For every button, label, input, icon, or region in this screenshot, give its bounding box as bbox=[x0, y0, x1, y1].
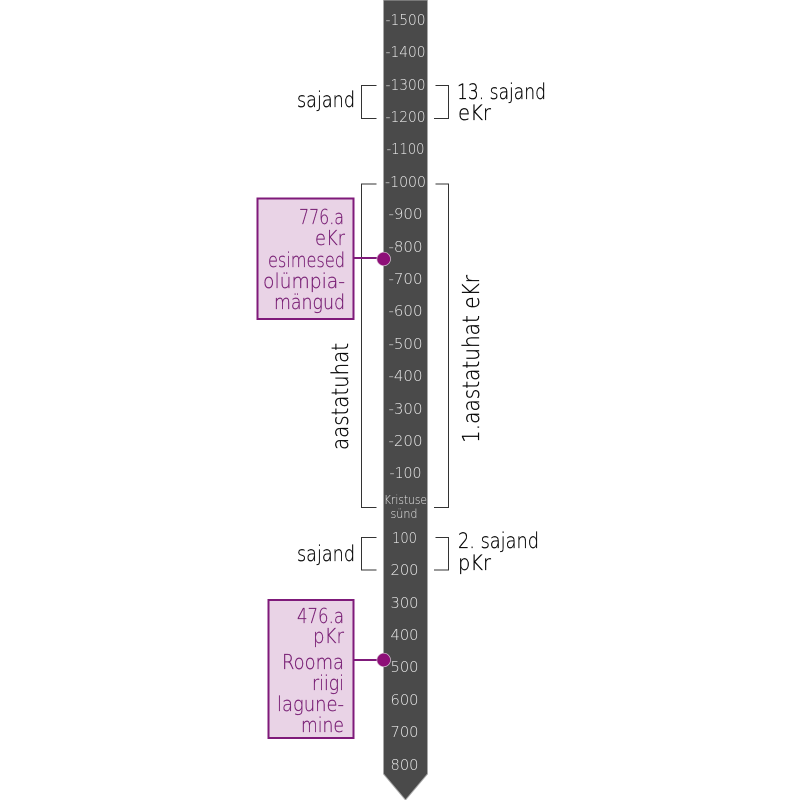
bracket: century right, bottom bbox=[434, 538, 448, 570]
label: birth of Christ: Kristuse bbox=[384, 493, 427, 507]
text: millennium, vertical: aastatuhat bbox=[328, 343, 354, 450]
year labels before Christ: -300 bbox=[388, 400, 422, 418]
callout: 776 BC first Olympic games: mängud bbox=[274, 290, 345, 314]
callout: 476 AD fall of the Roman Empire: riigi bbox=[312, 671, 344, 695]
bracket: century left, bottom bbox=[362, 538, 376, 570]
year labels after Christ: 300 bbox=[390, 594, 418, 612]
text: 13th century BC bbox=[457, 80, 546, 125]
label: birth of Christ: sünd bbox=[390, 507, 418, 521]
text: 1st millennium BC, vertical: 1.aastatuhat eKr bbox=[459, 275, 485, 443]
bracket: millennium left bbox=[362, 184, 376, 508]
year labels before Christ: -400 bbox=[388, 367, 422, 385]
bracket: millennium right bbox=[434, 184, 448, 508]
year labels after Christ: 600 bbox=[390, 691, 418, 709]
callout: 476 AD fall of the Roman Empire bbox=[268, 600, 354, 738]
text: 13th century BC: eKr bbox=[458, 101, 491, 125]
connector and dot: 776 BC bbox=[353, 252, 391, 266]
year labels before Christ bbox=[385, 11, 426, 482]
year labels before Christ: -800 bbox=[388, 238, 422, 256]
year labels before Christ: -900 bbox=[388, 205, 422, 223]
year labels after Christ: 200 bbox=[390, 561, 418, 579]
callout: 476 AD fall of the Roman Empire: lagune- bbox=[277, 692, 344, 716]
year labels after Christ bbox=[390, 529, 418, 774]
text: 2nd century AD: pKr bbox=[458, 551, 491, 575]
callout: 776 BC first Olympic games: esimesed bbox=[268, 248, 345, 272]
timeline bar with arrow tip bbox=[384, 0, 428, 800]
text: 2nd century AD: 2. sajand bbox=[458, 529, 539, 553]
year labels after Christ: 400 bbox=[390, 626, 418, 644]
callout: 776 BC first Olympic games bbox=[258, 198, 354, 319]
year labels after Christ: 500 bbox=[390, 658, 418, 676]
label: birth of Christ bbox=[384, 493, 427, 521]
callout: 476 AD fall of the Roman Empire: pKr bbox=[313, 624, 345, 648]
year labels after Christ: 800 bbox=[390, 756, 418, 774]
year labels before Christ: -700 bbox=[388, 270, 422, 288]
year labels before Christ: -100 bbox=[390, 464, 422, 482]
text: 13th century BC: 13. sajand bbox=[457, 80, 546, 104]
text: century, top left: sajand bbox=[297, 88, 355, 112]
year labels after Christ: 100 bbox=[392, 529, 417, 547]
bracket: century left, top bbox=[362, 86, 376, 118]
text: 2nd century AD bbox=[458, 529, 539, 575]
year labels before Christ: -1300 bbox=[386, 76, 426, 94]
year labels before Christ: -1400 bbox=[386, 43, 426, 61]
year labels before Christ: -1500 bbox=[386, 11, 426, 29]
text: century, bottom left: sajand bbox=[297, 542, 355, 566]
year labels before Christ: -1100 bbox=[386, 140, 424, 158]
year labels before Christ: -1200 bbox=[386, 108, 426, 126]
callout: 476 AD fall of the Roman Empire: mine bbox=[301, 713, 344, 737]
callout: 776 BC first Olympic games: 776.a bbox=[299, 205, 344, 229]
callout: 476 AD fall of the Roman Empire: 476.a bbox=[297, 604, 344, 628]
callout: 776 BC first Olympic games: eKr bbox=[315, 226, 346, 250]
bracket: century right, top bbox=[434, 86, 448, 118]
year labels before Christ: -500 bbox=[388, 335, 422, 353]
callout: 776 BC first Olympic games: olümpia- bbox=[263, 269, 345, 293]
year labels before Christ: -1000 bbox=[385, 173, 426, 191]
connector and dot: 476 AD bbox=[353, 653, 391, 667]
callout: 476 AD fall of the Roman Empire: Rooma bbox=[282, 650, 344, 674]
year labels before Christ: -600 bbox=[388, 302, 422, 320]
year labels before Christ: -200 bbox=[388, 432, 422, 450]
year labels after Christ: 700 bbox=[390, 723, 418, 741]
